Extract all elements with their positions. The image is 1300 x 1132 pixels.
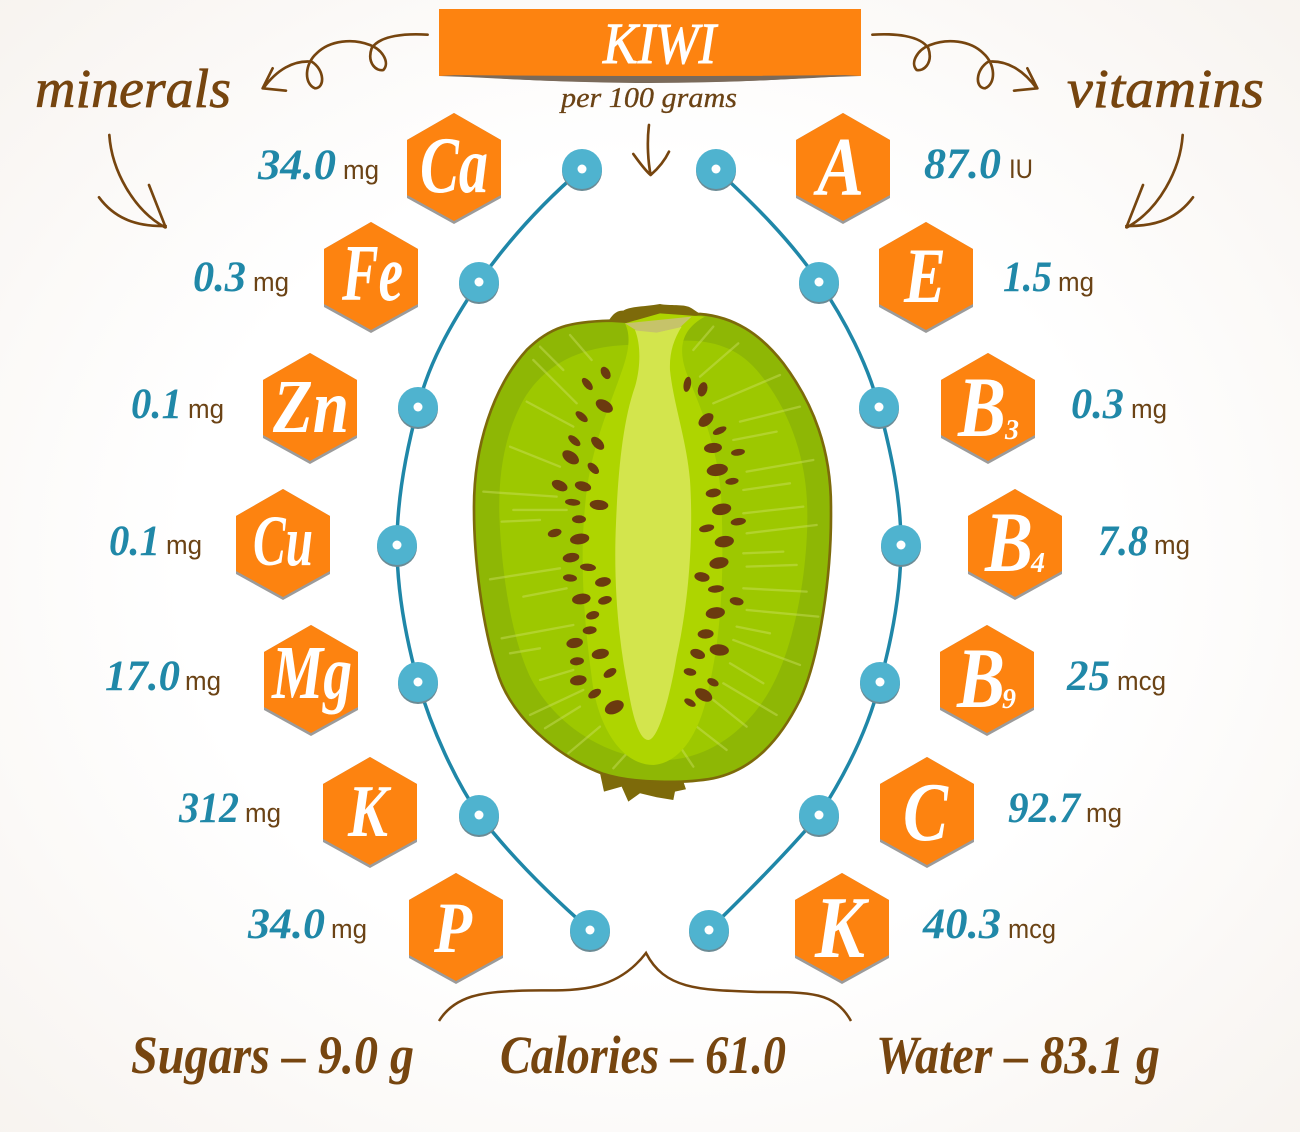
vitamin: B3 (941, 353, 1035, 464)
value: K (178, 785, 281, 832)
connector curve: vitamins (709, 169, 901, 930)
vitamin: B4: 4 (1030, 548, 1045, 579)
value: B9 (1066, 653, 1166, 700)
value: B4: 7.8 (1098, 518, 1148, 565)
value: Cu (109, 518, 202, 565)
value: Ca (257, 142, 379, 189)
mineral: Mg: Mg (271, 631, 352, 715)
arrow: minerals down (99, 135, 166, 227)
value: B9: mcg (1117, 666, 1166, 696)
value: B3 (1071, 381, 1167, 428)
vitamin: K: K (814, 880, 870, 977)
value: P: mg (331, 914, 367, 944)
value: B9: 25 (1066, 653, 1110, 700)
vitamin: B9: 9 (1002, 684, 1016, 715)
mineral: Ca (407, 113, 501, 224)
stat: sugars: Sugars – 9.0 g (131, 1025, 414, 1085)
mineral: Mg (264, 625, 358, 736)
value: B3: 0.3 (1071, 381, 1124, 428)
value: A (924, 141, 1033, 188)
heading: minerals: minerals (35, 58, 231, 119)
value: P: 34.0 (247, 901, 325, 948)
value: Ca: 34.0 (257, 142, 336, 189)
value: E: mg (1058, 267, 1094, 297)
kiwi mid flesh (499, 341, 807, 760)
value: Zn (131, 381, 224, 428)
arrow: down from subtitle (633, 125, 669, 175)
kiwi top tip (625, 317, 692, 333)
arrow: looping to minerals (263, 34, 428, 91)
mineral: Fe (324, 222, 418, 333)
value: K: mg (245, 798, 281, 828)
title banner (439, 9, 861, 83)
value: C (1008, 785, 1122, 832)
value: B3: mg (1131, 394, 1167, 424)
mineral: Zn (263, 353, 357, 464)
vitamin: E: E (903, 232, 946, 319)
arrow: vitamins down (1126, 135, 1193, 227)
mineral: Cu (236, 489, 330, 600)
vitamin: C: C (903, 766, 949, 859)
vitamin: A: A (813, 121, 864, 214)
stat: water: Water – 83.1 g (876, 1025, 1160, 1085)
vitamin: B4: B (984, 494, 1033, 590)
vitamin: B3: B (957, 359, 1006, 455)
vitamin: E (879, 222, 973, 333)
vitamin: B9 (940, 625, 1034, 736)
kiwi light rays (483, 327, 818, 768)
kiwi illustration (474, 304, 831, 802)
mineral: K (323, 757, 417, 868)
value: Cu: mg (166, 530, 202, 560)
title banner: KIWI (602, 11, 718, 76)
value: Mg (105, 653, 221, 700)
value: C: 92.7 (1008, 785, 1081, 832)
connector dots (377, 149, 921, 952)
arrow: looping to vitamins (872, 34, 1037, 91)
value: Ca: mg (343, 155, 379, 185)
mineral: Ca: Ca (420, 122, 488, 210)
mineral: K: K (347, 771, 392, 853)
value: Mg: mg (185, 666, 221, 696)
subtitle: per 100 grams: per 100 grams (559, 83, 737, 114)
kiwi top stem (607, 304, 705, 333)
value: Cu: 0.1 (109, 518, 160, 565)
value: P (247, 901, 367, 948)
kiwi outer skin and rim (474, 314, 831, 782)
kiwi core (615, 327, 691, 740)
vitamin: A (796, 113, 890, 224)
vitamin: K (795, 873, 889, 984)
kiwi seeds (547, 365, 746, 717)
mineral: P: P (433, 888, 473, 968)
brace (439, 953, 851, 1021)
value: K vitamin (922, 901, 1056, 948)
value: C: mg (1086, 798, 1122, 828)
heading: vitamins: vitamins (1067, 58, 1264, 119)
value: K: 312 (178, 785, 239, 832)
value: A: 87.0 (924, 141, 1001, 188)
vitamin: B9: B (956, 630, 1005, 726)
value: K vitamin: 40.3 (922, 901, 1001, 948)
mineral: P (409, 873, 503, 984)
kiwi inner flesh (583, 313, 722, 765)
value: B4: mg (1154, 530, 1190, 560)
vitamin: B4 (968, 489, 1062, 600)
value: Fe: 0.3 (193, 254, 246, 301)
value: Fe: mg (253, 267, 289, 297)
vitamin: C (880, 757, 974, 868)
value: E: 1.5 (1003, 254, 1052, 301)
kiwi bottom stem (599, 770, 686, 802)
vitamin: B3: 3 (1004, 415, 1019, 446)
value: Zn: 0.1 (131, 381, 182, 428)
value: B4 (1098, 518, 1190, 565)
value: E (1003, 254, 1094, 301)
value: K vitamin: mcg (1008, 914, 1056, 944)
connector curve: minerals (397, 169, 590, 930)
mineral: Cu: Cu (253, 501, 313, 581)
value: A: IU (1009, 154, 1033, 184)
value: Zn: mg (188, 394, 224, 424)
value: Mg: 17.0 (105, 653, 180, 700)
stat: calories: Calories – 61.0 (500, 1025, 786, 1085)
mineral: Zn: Zn (272, 365, 349, 449)
mineral: Fe: Fe (341, 230, 403, 318)
value: Fe (193, 254, 289, 301)
